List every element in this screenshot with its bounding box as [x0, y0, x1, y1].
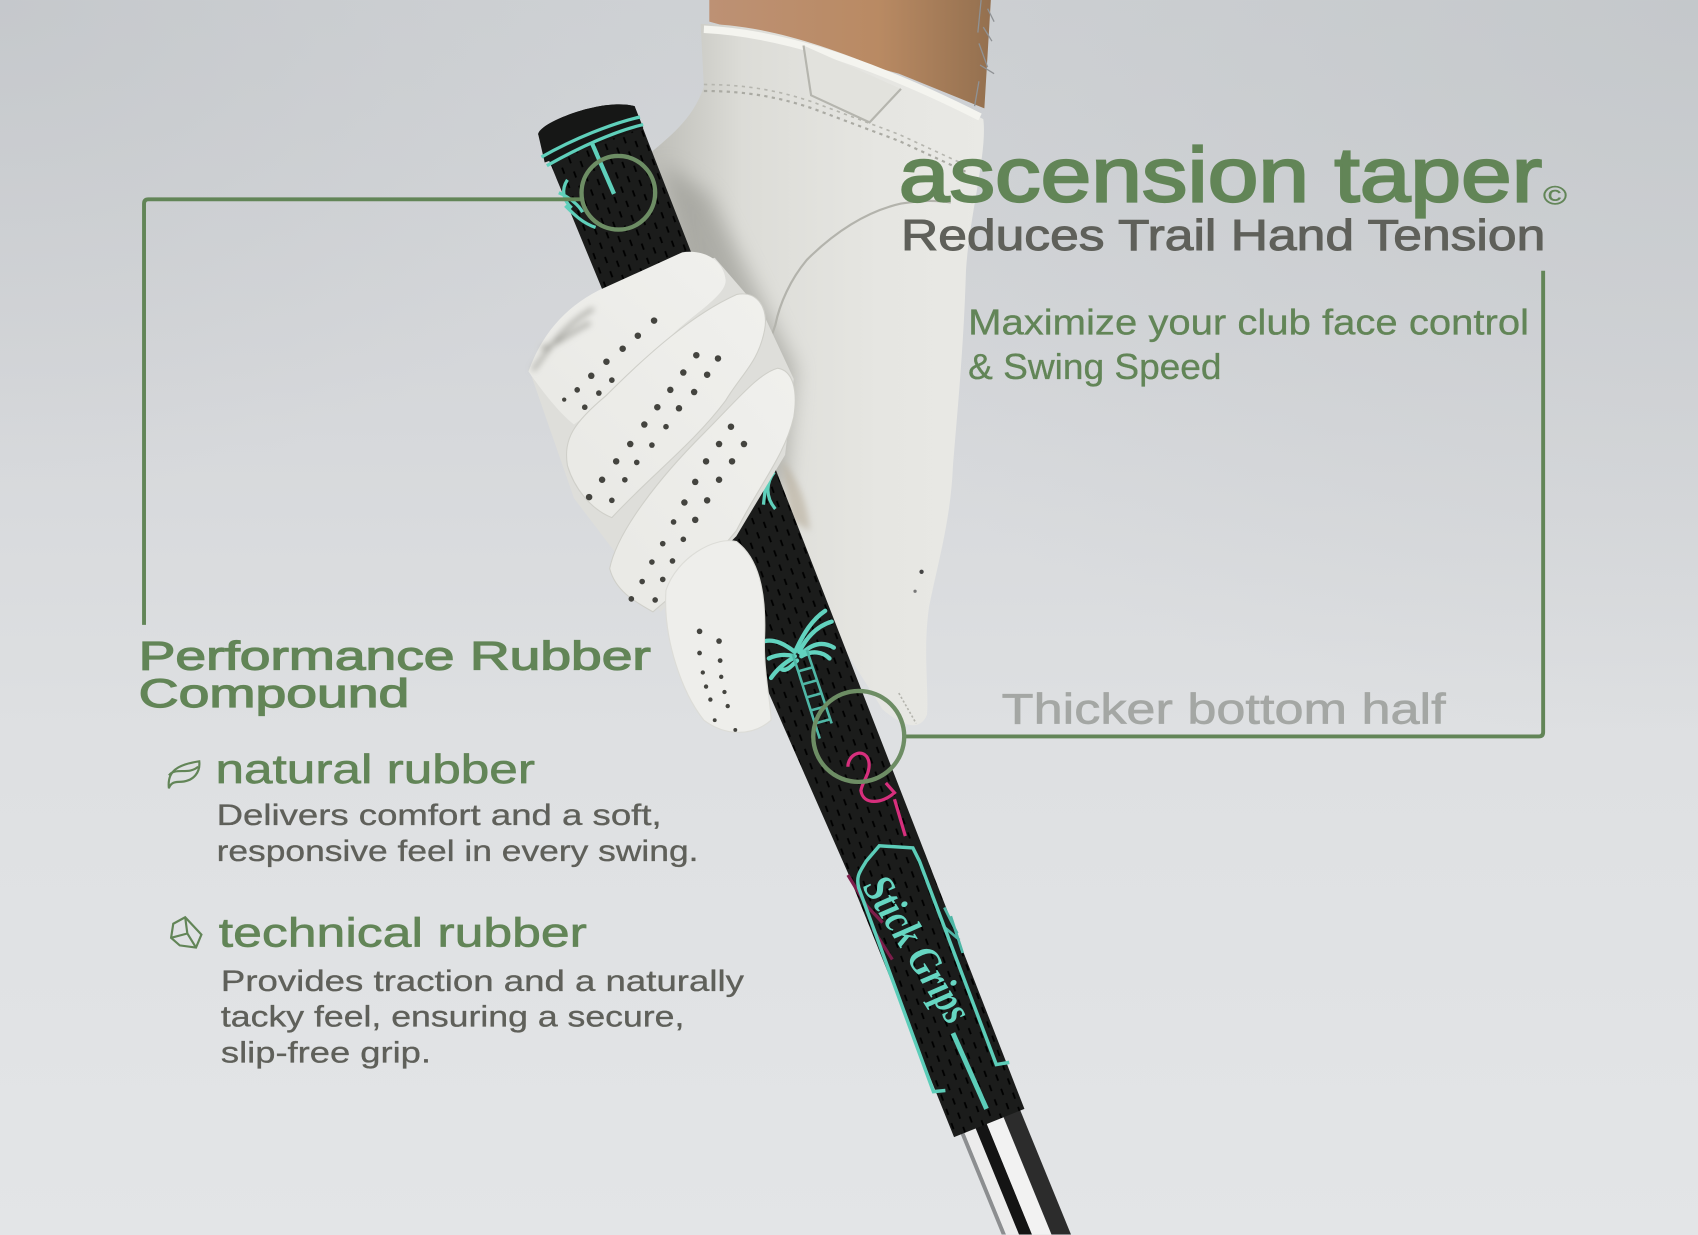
item text: natural rubber: responsive feel in every swing. [217, 836, 698, 868]
heading: performance rubber compound: Compound [139, 672, 409, 716]
photo: golf club with gloved hand [528, 0, 1071, 1235]
item text: technical rubber: slip-free grip. [221, 1037, 431, 1069]
stitching [704, 91, 969, 173]
palm dots [919, 570, 924, 574]
mid palm [763, 472, 775, 509]
badge outline [858, 846, 1009, 1092]
copyright mark: © [1543, 181, 1567, 211]
callout ring top [582, 156, 655, 230]
item heading: technical rubber: technical rubber [219, 909, 587, 955]
inner line [953, 1033, 987, 1109]
item text: technical rubber: tacky feel, ensuring a secure, [221, 1002, 684, 1034]
heading: ascension taper: ascension taper [899, 132, 1542, 218]
text block: maximize: & Swing Speed [968, 347, 1222, 387]
grip top rings [541, 117, 640, 157]
upper palm [559, 180, 596, 227]
grip alignment line [592, 144, 614, 194]
item text: natural rubber: Delivers comfort and a soft, [217, 800, 662, 832]
grip [538, 104, 1024, 1137]
glove body [639, 24, 984, 725]
subheading: Reduces Trail Hand Tension [901, 212, 1545, 260]
item text: natural rubber [217, 800, 698, 868]
palm tree [765, 611, 834, 739]
shaft [949, 1105, 1071, 1235]
callout ring bottom [813, 691, 904, 782]
callout line: grip top to rubber compound [144, 156, 655, 625]
item heading: natural rubber: natural rubber [215, 746, 535, 792]
icon: rubber block [171, 917, 201, 948]
callout line: thicker bottom half [813, 271, 1543, 782]
flamingo back side [848, 875, 892, 959]
finger 2 [567, 294, 765, 518]
fingers [528, 252, 795, 732]
finger 3 [610, 368, 795, 612]
flamingo [848, 753, 905, 836]
item text: technical rubber [221, 966, 744, 1069]
thumb pad [666, 541, 771, 732]
finger 1 [528, 252, 726, 425]
text block: maximize [968, 303, 1529, 387]
perforations [562, 317, 747, 732]
finger underlay [531, 258, 794, 612]
text block: maximize: Maximize your club face control [968, 303, 1529, 343]
wrist cuff [704, 29, 980, 117]
grip logo: Stick Grips [854, 867, 981, 1032]
cuff patch [804, 46, 901, 122]
item text: technical rubber: Provides traction and a naturally [221, 966, 744, 998]
fold shadow [782, 460, 810, 531]
icon: leaf [169, 761, 199, 788]
arm [709, 0, 994, 108]
palm seam [765, 201, 951, 360]
heading: performance rubber compound: Performance Rubber [139, 634, 651, 678]
palm back side [944, 908, 963, 953]
glove shadow near grip [663, 162, 796, 498]
label: thicker bottom half: Thicker bottom half [1002, 685, 1446, 732]
heading: performance rubber compound [139, 634, 651, 716]
